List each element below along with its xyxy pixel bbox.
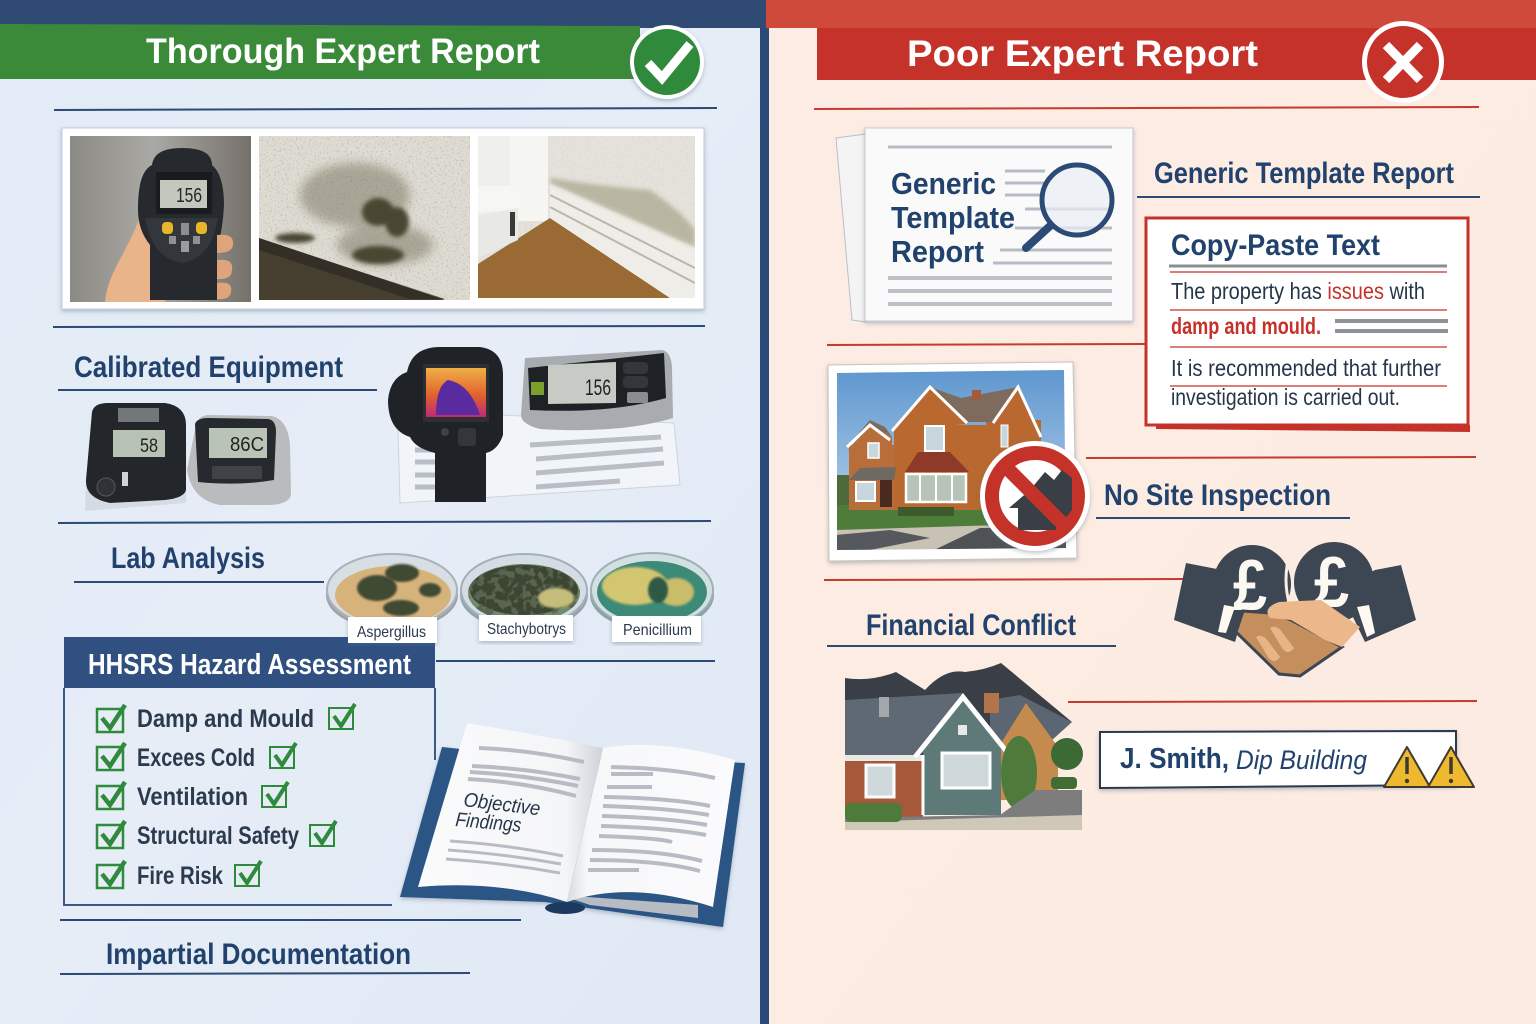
- row: Excees Cold: Excees Cold: [137, 744, 255, 772]
- header: Poor Expert Report: Poor Expert Report: [907, 33, 1258, 74]
- header: Poor Expert Report: [817, 28, 1536, 80]
- petri dish: Penicillium: [591, 553, 713, 629]
- panel: HHSRS Hazard Assessment: [64, 637, 435, 905]
- callout: Copy-Paste Text: damp and mould.: [1171, 313, 1321, 339]
- photo: meter in hand: 156: [176, 185, 202, 207]
- panel: generic template document: [836, 128, 1133, 322]
- icon: handshake with pound bags: £: [1233, 546, 1267, 626]
- callout: Copy-Paste Text: investigation is carried out.: [1171, 384, 1400, 410]
- icon: no house prohibition sign: [980, 441, 1090, 551]
- top strip right: [766, 0, 1536, 28]
- heading: Financial Conflict: Financial Conflict: [866, 609, 1076, 642]
- icon: report sheet under thermal camera: [398, 415, 680, 503]
- row: Ventilation: [97, 782, 288, 811]
- icon: black moisture meter: [85, 403, 186, 511]
- top strip left: [0, 0, 766, 28]
- callout: Copy-Paste Text: The property has issues with: [1171, 278, 1425, 304]
- icon: handshake with pound bags: £: [1314, 543, 1349, 623]
- petri dish: Stachybotrys: [461, 554, 587, 629]
- panel: HHSRS Hazard Assessment: HHSRS Hazard Assessment: [88, 649, 411, 681]
- icon: digital meter: [521, 350, 673, 430]
- icon: thermal camera: [388, 347, 503, 502]
- icon: open book Objective Findings: [400, 723, 745, 927]
- label: Stachybotrys: [479, 615, 573, 641]
- row: Damp and Mould: Damp and Mould: [137, 705, 314, 733]
- right panel background: [763, 0, 1536, 1024]
- label: Stachybotrys: Stachybotrys: [487, 621, 566, 638]
- icon: digital meter: 156: [585, 375, 611, 400]
- label: J. Smith, Dip Building: Dip Building: [1236, 745, 1367, 775]
- icon: red cross badge: [1362, 21, 1444, 103]
- heading: Calibrated Equipment: Calibrated Equipment: [74, 351, 343, 384]
- panel: generic template document: Report: [891, 234, 984, 269]
- photo: grey clad houses: [845, 663, 1083, 830]
- header: Thorough Expert Report: Thorough Expert Report: [146, 32, 540, 71]
- photo: meter in hand: [70, 136, 251, 302]
- row: Fire Risk: Fire Risk: [137, 862, 223, 890]
- row: Ventilation: Ventilation: [137, 783, 248, 811]
- label: Penicillium: Penicillium: [623, 622, 692, 639]
- heading: Lab Analysis: Lab Analysis: [111, 542, 265, 575]
- label: J. Smith, Dip Building: [1100, 731, 1456, 788]
- callout: Copy-Paste Text: Copy-Paste Text: [1171, 229, 1380, 262]
- row: Fire Risk: [97, 861, 261, 890]
- label: Aspergillus: [348, 617, 437, 643]
- panel: evidence photographs: [62, 128, 704, 309]
- heading: No Site Inspection: No Site Inspection: [1104, 479, 1331, 512]
- icon: black moisture meter: 58: [140, 436, 158, 457]
- icon: handshake with pound bags: [1174, 542, 1416, 676]
- left panel background: [0, 0, 763, 1024]
- icon: grey hygrometer: 86C: [230, 434, 264, 456]
- icon: grey hygrometer: [187, 415, 291, 505]
- icon: magnifying glass: [1026, 165, 1112, 248]
- petri dish: Aspergillus: [327, 554, 457, 629]
- row: Structural Safety: Structural Safety: [137, 822, 299, 850]
- label: Penicillium: [612, 616, 701, 642]
- icon: open book Objective Findings: Findings: [455, 809, 522, 837]
- label: Aspergillus: Aspergillus: [357, 624, 426, 641]
- heading: Generic Template Report: Generic Template Report: [1154, 157, 1454, 190]
- icon: green tick badge: [630, 25, 704, 99]
- callout: Copy-Paste Text: [1146, 218, 1470, 432]
- callout: Copy-Paste Text: It is recommended that further: [1171, 355, 1441, 381]
- panel: generic template document: Template: [891, 200, 1015, 235]
- photo: mould on wall: [259, 136, 470, 300]
- photo: damp skirting board: [478, 136, 695, 298]
- photo: brick house: [828, 362, 1077, 561]
- header: Thorough Expert Report: [0, 24, 640, 79]
- label: J. Smith, Dip Building: J. Smith,: [1120, 743, 1229, 775]
- icon: open book Objective Findings: Objective: [462, 789, 541, 820]
- heading: Impartial Documentation: Impartial Documentation: [106, 938, 411, 971]
- central divider: [760, 28, 769, 1024]
- panel: generic template document: Generic: [891, 166, 996, 201]
- icon: warning triangles: [1384, 747, 1474, 787]
